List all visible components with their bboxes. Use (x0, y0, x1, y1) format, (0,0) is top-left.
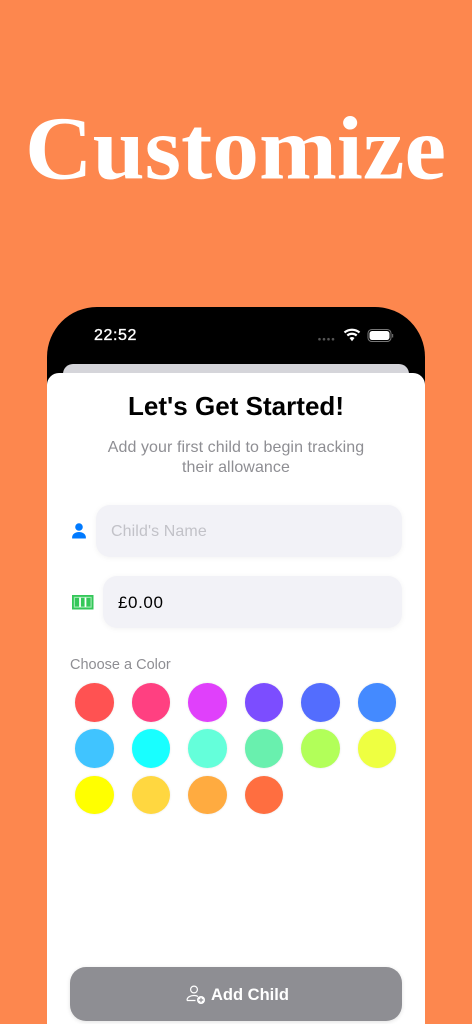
placeholder: Child's Name (111, 523, 207, 540)
subtitle: their allowance (182, 459, 290, 476)
subtitle: Add your first child to begin tracking (108, 439, 364, 456)
status icons (318, 328, 394, 342)
icon: add person (186, 986, 205, 1004)
background sheet (63, 364, 409, 404)
button label: Add Child (211, 986, 289, 1004)
subtitle (108, 439, 364, 476)
status bar background (47, 307, 425, 417)
swatch row 1 (74, 682, 396, 722)
add child button (70, 967, 402, 1021)
white sheet (47, 373, 425, 1024)
amount value: £0.00 (118, 593, 164, 612)
phone frame (47, 307, 425, 1024)
name field (96, 505, 402, 557)
amount field (103, 576, 402, 628)
swatch row 2 (74, 728, 396, 768)
swatch row 3 (74, 776, 284, 814)
label: choose a color: Choose a Color (70, 657, 171, 673)
clock: 22:52 (94, 327, 137, 344)
color swatches (74, 682, 396, 814)
icon: person (72, 523, 86, 538)
icon: banknote (72, 595, 94, 610)
heading: Let's Get Started! (128, 391, 344, 421)
title: Customize (25, 100, 446, 198)
